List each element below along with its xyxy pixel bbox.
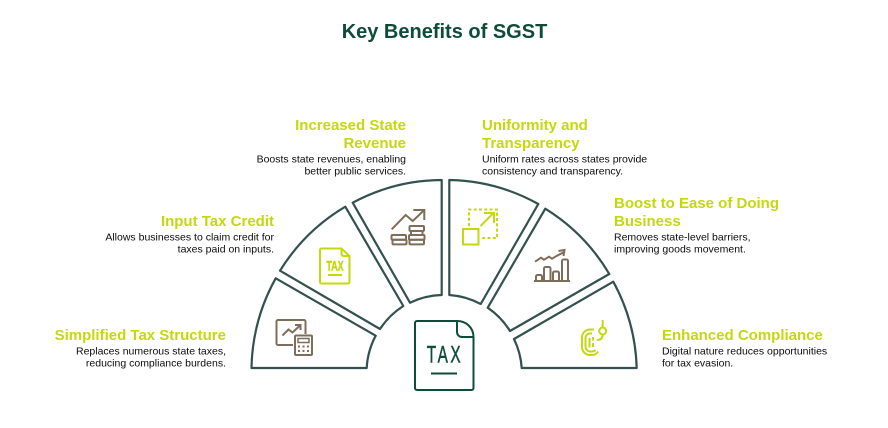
description: Allows businesses to claim credit for bbox=[105, 232, 274, 244]
description: Uniform rates across states provide bbox=[482, 154, 647, 166]
heading line 2: Business bbox=[614, 213, 681, 230]
segment 3 bbox=[353, 180, 442, 303]
icon: central tax document: TAX bbox=[427, 342, 463, 369]
description: Digital nature reduces opportunities bbox=[662, 346, 827, 358]
description: Removes state-level barriers, bbox=[614, 232, 751, 244]
segment 4 bbox=[449, 180, 538, 304]
icon: bar chart with arrow bbox=[534, 250, 570, 281]
heading: Boost to Ease of Doing bbox=[614, 195, 779, 212]
icon: chart and calculator bbox=[276, 320, 312, 355]
description: taxes paid on inputs. bbox=[178, 244, 274, 256]
panel: Boost to Ease of Doing Business bbox=[488, 195, 779, 331]
segment 5 bbox=[488, 209, 609, 331]
segment 1 bbox=[252, 278, 376, 368]
panel: Input Tax Credit bbox=[105, 207, 403, 329]
description: reducing compliance burdens. bbox=[86, 358, 226, 370]
segment 6 bbox=[514, 282, 637, 368]
icon: tax document bbox=[320, 248, 350, 284]
panel: Simplified Tax Structure bbox=[55, 278, 376, 370]
icon: coins and rising arrow bbox=[392, 210, 424, 244]
segment 2 bbox=[280, 207, 403, 329]
description: Replaces numerous state taxes, bbox=[76, 346, 226, 358]
icon: scale up squares bbox=[463, 210, 497, 244]
heading: Uniformity and bbox=[482, 117, 588, 134]
panel: Increased State Revenue bbox=[257, 117, 442, 303]
icon: central tax document bbox=[415, 321, 474, 390]
description: improving goods movement. bbox=[614, 244, 746, 256]
description: consistency and transparency. bbox=[482, 166, 623, 178]
description: Boosts state revenues, enabling bbox=[257, 154, 406, 166]
panel: Uniformity and Transparency bbox=[449, 117, 647, 304]
icon: fingerprint bbox=[582, 320, 606, 355]
heading: Input Tax Credit bbox=[161, 213, 274, 230]
heading: Enhanced Compliance bbox=[662, 327, 823, 344]
description: for tax evasion. bbox=[662, 358, 733, 370]
title: Key Benefits of SGST bbox=[342, 21, 547, 43]
icon: tax document: TAX bbox=[326, 258, 344, 274]
heading line 2: Transparency bbox=[482, 135, 580, 152]
heading: Increased State bbox=[295, 117, 406, 134]
panel: Enhanced Compliance bbox=[514, 282, 827, 370]
description: better public services. bbox=[304, 166, 406, 178]
heading line 2: Revenue bbox=[343, 135, 406, 152]
heading: Simplified Tax Structure bbox=[55, 327, 226, 344]
